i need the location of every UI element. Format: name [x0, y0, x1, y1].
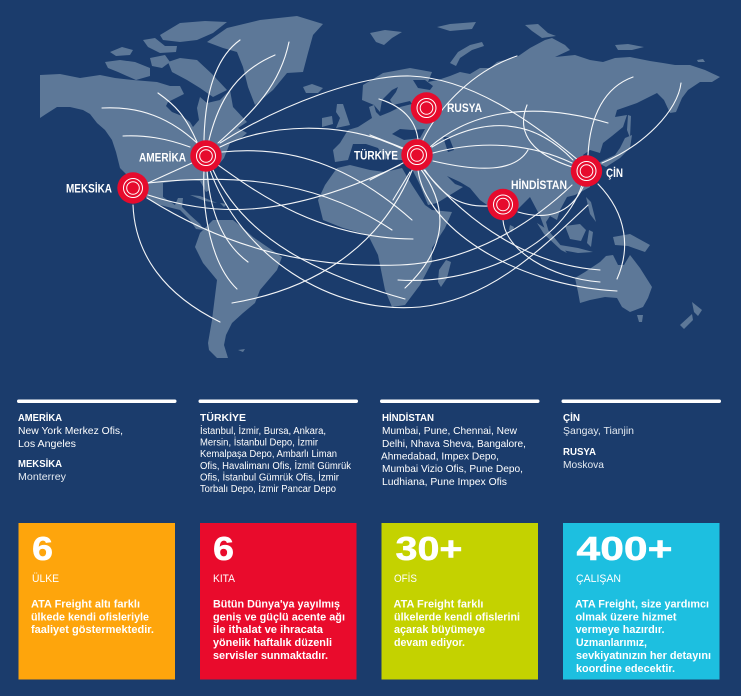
text: Hindistan offices: Ahmedabad, Impex Depo, [381, 450, 499, 462]
card description [31, 598, 154, 636]
text: Türkiye offices: Ofis, Havalimanı Ofis, İzmit Gümrük [200, 459, 352, 472]
White Sea [413, 80, 433, 90]
panel: Amerika and Meksika offices [17, 400, 176, 483]
card description: koordine edecektir. [576, 663, 675, 675]
card description: olmak üzere hizmet [576, 612, 677, 624]
Indonesia and Philippines [537, 197, 650, 253]
card description: yönelik haftalık düzenli [213, 637, 332, 649]
card description: sevkiyatınızın her detayını [576, 650, 711, 662]
Greenland [207, 16, 323, 105]
card: 6 Ülke [18, 523, 175, 680]
stat number: 6 [32, 530, 53, 567]
Sri Lanka [509, 225, 514, 232]
text: Hindistan offices: Mumbai Vizio Ofis, Pune Depo, [382, 463, 523, 475]
card description: ATA Freight altı farklı [31, 598, 140, 610]
British Isles [322, 104, 350, 128]
map labels: RUSYA [447, 103, 482, 115]
marker: Amerika [190, 140, 222, 172]
Black Sea [392, 129, 425, 140]
heading: Hindistan: HİNDİSTAN [382, 411, 434, 424]
Canadian Arctic islands [105, 21, 227, 97]
card description: devam ediyor. [394, 637, 465, 649]
card description: vermeye hazırdır. [576, 624, 664, 636]
heading: Türkiye: TÜRKİYE [200, 411, 246, 424]
text: Hindistan offices: Ludhiana, Pune Impex Ofis [382, 476, 507, 488]
map labels [66, 103, 623, 196]
Svalbard and Arctic islands [370, 22, 705, 62]
panel: Hindistan offices [380, 400, 540, 488]
card description: ülkelerde kendi ofislerini [394, 612, 520, 624]
heading: Amerika: AMERİKA [18, 411, 62, 424]
Madagascar [438, 260, 451, 287]
card description [575, 598, 711, 675]
Iceland [303, 84, 323, 93]
card description: Bütün Dünya'ya yayılmış [213, 598, 340, 610]
marker: Rusya [411, 92, 442, 124]
text: Hindistan offices: Delhi, Nhava Sheva, Bangalore, [382, 438, 526, 450]
text: Türkiye offices: Torbalı Depo, İzmir Pancar Depo [200, 482, 336, 495]
route arcs [102, 40, 681, 322]
card description: geniş ve güçlü acente ağı [213, 612, 345, 624]
map labels: AMERİKA [139, 152, 186, 164]
card description: servisler sunmaktadır. [213, 650, 328, 662]
Japan [598, 115, 632, 167]
Novaya Zemlya [450, 42, 484, 66]
marker: Çin [571, 155, 602, 187]
heading: Çin: ÇİN [563, 411, 580, 424]
stat label: KITA [213, 573, 236, 585]
continent: South America [195, 220, 282, 358]
text: Amerika offices: Los Angeles [18, 438, 76, 450]
stat label: ÜLKE [32, 573, 59, 585]
stat label: ÇALIŞAN [576, 573, 621, 585]
text: Rusya offices: Moskova [563, 459, 604, 471]
stat label: OFİS [394, 572, 417, 585]
text: Amerika offices: New York Merkez Ofis, [18, 425, 123, 437]
stat number: 6 [213, 530, 234, 567]
Falkland Islands [238, 349, 245, 352]
text: Türkiye offices: Kemalpaşa Depo, Ambarlı Liman [200, 449, 337, 460]
Caspian Sea [443, 137, 454, 152]
text: Amerika offices [18, 425, 123, 450]
card description [394, 598, 520, 649]
continent: Africa [318, 165, 452, 307]
marker: Hindistan [487, 189, 519, 220]
map labels: ÇİN [606, 167, 623, 180]
text: Türkiye offices [200, 424, 352, 495]
card description: Uzmanlarımız, [576, 637, 647, 649]
text: Türkiye offices: Mersin, İstanbul Depo, İzmir [200, 436, 319, 448]
card description: faaliyet göstermektedir. [31, 624, 154, 636]
card description: ülkede kendi ofisleriyle [31, 612, 149, 624]
card description: ile ithalat ve ihracata [213, 624, 324, 636]
world map [40, 16, 720, 358]
stat number: 400+ [576, 530, 672, 567]
card: 30+ Ofis [382, 523, 538, 680]
map labels: TÜRKİYE [354, 150, 398, 162]
continent: Australia [575, 255, 652, 312]
map labels: MEKSİKA [66, 182, 112, 196]
map labels: HİNDİSTAN [511, 179, 567, 192]
heading: Meksika: MEKSİKA [18, 457, 62, 470]
panel: Çin and Rusya offices [562, 400, 721, 471]
card description: açarak büyümeye [394, 624, 485, 636]
Caribbean islands [190, 195, 227, 207]
New Zealand [680, 302, 702, 329]
text: Hindistan offices [381, 425, 526, 488]
marker: Türkiye [401, 139, 433, 171]
card description: ATA Freight, size yardımcı [575, 598, 709, 610]
text: Türkiye offices: Ofis, İstanbul Gümrük Ofis, İzmir [200, 470, 340, 484]
text: Hindistan offices: Mumbai, Pune, Chennai, New [382, 425, 517, 437]
Tasmania [637, 315, 643, 322]
heading: Rusya: RUSYA [563, 446, 596, 458]
text: Türkiye offices: İstanbul, İzmir, Bursa, Ankara, [200, 424, 326, 437]
marker: Meksika [117, 172, 149, 204]
card description [213, 598, 345, 662]
card: 400+ Çalışan [563, 523, 720, 680]
continent: Eurasia [333, 38, 720, 236]
Baltic Sea [374, 87, 412, 116]
card: 6 Kıta [200, 523, 356, 680]
panel: Türkiye offices [198, 400, 358, 495]
continent: North America [40, 74, 247, 230]
text: Çin offices: Şangay, Tianjin [563, 425, 634, 437]
stat number: 30+ [396, 530, 462, 567]
card description: ATA Freight farklı [394, 598, 484, 610]
text: Meksika offices: Monterrey [18, 471, 67, 483]
